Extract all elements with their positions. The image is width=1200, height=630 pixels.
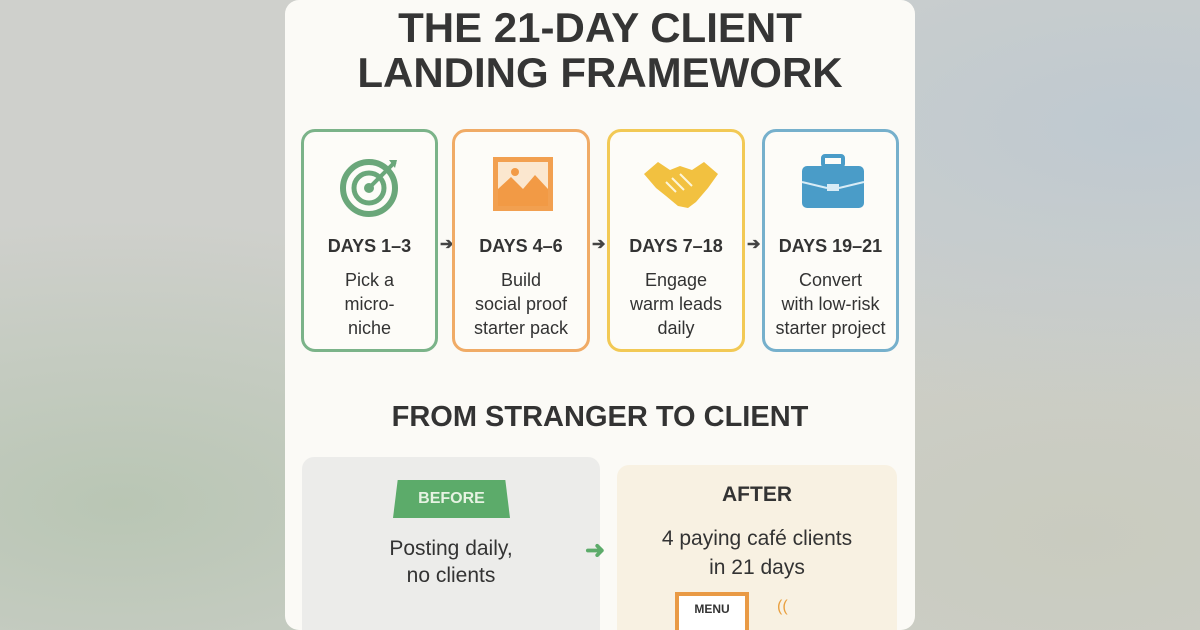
- step 2: social proof: [475, 294, 567, 314]
- step 4: with low-risk: [781, 294, 880, 314]
- step 1: micro-: [344, 294, 394, 314]
- step 1: DAYS 1–3: [328, 236, 411, 256]
- step 4: [762, 129, 899, 352]
- icon: handshake: [644, 162, 718, 208]
- step 3: Engage: [645, 270, 707, 290]
- after heading: AFTER: [722, 483, 792, 506]
- step 2: Build: [501, 270, 541, 290]
- after text: [662, 527, 852, 579]
- before tag: [393, 480, 510, 518]
- step 4: DAYS 19–21: [779, 236, 882, 256]
- arrow: ➔: [440, 236, 453, 253]
- title: [357, 4, 843, 96]
- before tag: BEFORE: [418, 490, 485, 507]
- step 1: Pick a: [345, 270, 394, 290]
- panel: after: [617, 465, 897, 630]
- step 4: starter project: [775, 318, 886, 338]
- arrow: ➔: [747, 236, 760, 253]
- step 3: warm leads: [630, 294, 722, 314]
- step 4: Convert: [799, 270, 862, 290]
- step 2: starter pack: [474, 318, 568, 338]
- step 3: daily: [657, 318, 695, 338]
- icon: menu board: [675, 592, 749, 630]
- arrow: before to after: ➜: [585, 537, 605, 564]
- before text: Posting daily,: [389, 537, 513, 560]
- step 3: DAYS 7–18: [629, 236, 723, 256]
- step 2: DAYS 4–6: [479, 236, 563, 256]
- panel: before: [302, 457, 600, 630]
- step 1: niche: [348, 318, 391, 338]
- before text: no clients: [407, 564, 495, 587]
- step 1: [301, 129, 438, 352]
- icon: briefcase: [802, 154, 864, 208]
- after text: 4 paying café clients: [662, 527, 852, 550]
- step 3: [607, 129, 745, 352]
- icon: target: [340, 159, 398, 217]
- before text: [389, 537, 513, 587]
- title: THE 21-DAY CLIENT: [398, 4, 802, 51]
- card: [285, 0, 915, 630]
- step 2: [452, 129, 590, 352]
- icon: steam: ((: [777, 598, 788, 615]
- title: LANDING FRAMEWORK: [357, 49, 843, 96]
- icon: menu board: MENU: [694, 602, 730, 616]
- arrow: ➔: [592, 236, 605, 253]
- icon: image: [493, 157, 553, 211]
- after text: in 21 days: [709, 556, 805, 579]
- section heading: FROM STRANGER TO CLIENT: [392, 401, 808, 433]
